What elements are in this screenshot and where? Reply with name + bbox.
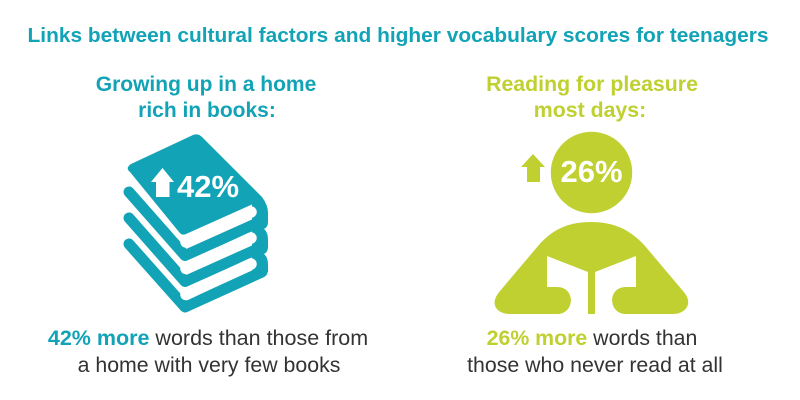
heading: reading: most days: — [534, 98, 646, 122]
heading: books: Growing up in a home — [96, 73, 316, 96]
caption: reading — [467, 326, 723, 377]
caption: books: 42% more words than those from — [48, 326, 368, 350]
caption: reading: those who never read at all — [467, 353, 723, 377]
caption: reading: 26% more words than — [487, 326, 697, 350]
icon: reader body with open book — [495, 222, 688, 314]
heading: reading: Reading for pleasure — [486, 72, 698, 96]
heading: books: rich in books: — [138, 99, 276, 122]
icon: stack of books — [128, 134, 268, 307]
icon: up arrow — [521, 154, 545, 182]
heading: books — [96, 73, 316, 122]
head percentage: 26% — [560, 154, 623, 189]
icon: up arrow on book — [151, 168, 174, 197]
caption: books second line: a home with very few books — [78, 353, 340, 377]
book percentage: 42% — [177, 169, 239, 204]
heading: reading — [486, 72, 698, 122]
icon: head — [551, 132, 632, 213]
panel: reading — [467, 72, 723, 377]
title: Links between cultural factors and higher vocabulary scores for teenagers — [28, 24, 768, 47]
panel: books — [48, 73, 368, 377]
